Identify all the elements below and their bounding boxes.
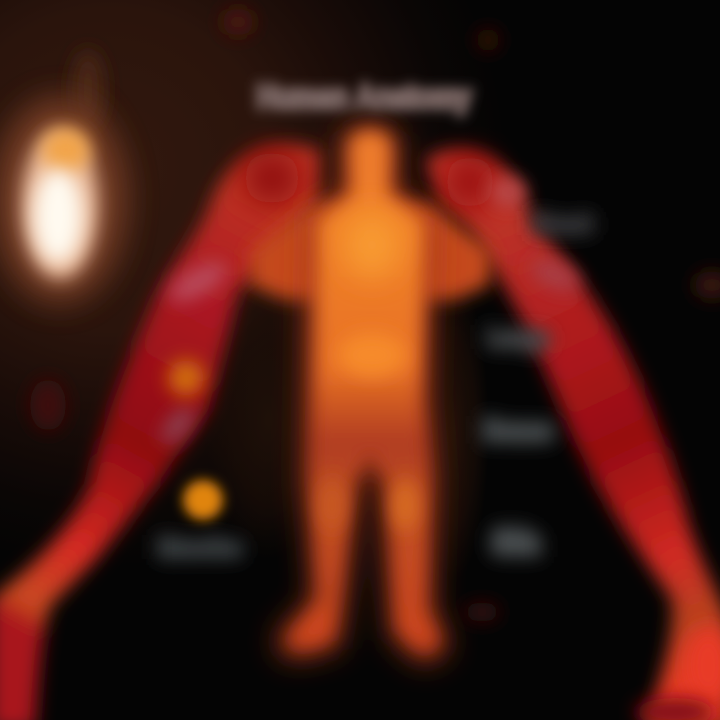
human body figure xyxy=(250,129,492,660)
title: Human Anatomy xyxy=(256,78,472,116)
label: right caption one: Heart xyxy=(532,208,592,238)
icon: left arm orange marker xyxy=(168,360,204,396)
icon: amber circle lower left xyxy=(183,480,223,520)
label: right caption four: Skin xyxy=(492,524,540,560)
label: right caption two: Lungs xyxy=(487,322,549,352)
left red arm xyxy=(0,145,320,720)
icon: glowing lamp xyxy=(0,96,128,304)
right red arm xyxy=(425,150,720,720)
label: right caption three: Bones xyxy=(483,414,553,447)
label: lower left caption: Muscles xyxy=(158,532,242,562)
